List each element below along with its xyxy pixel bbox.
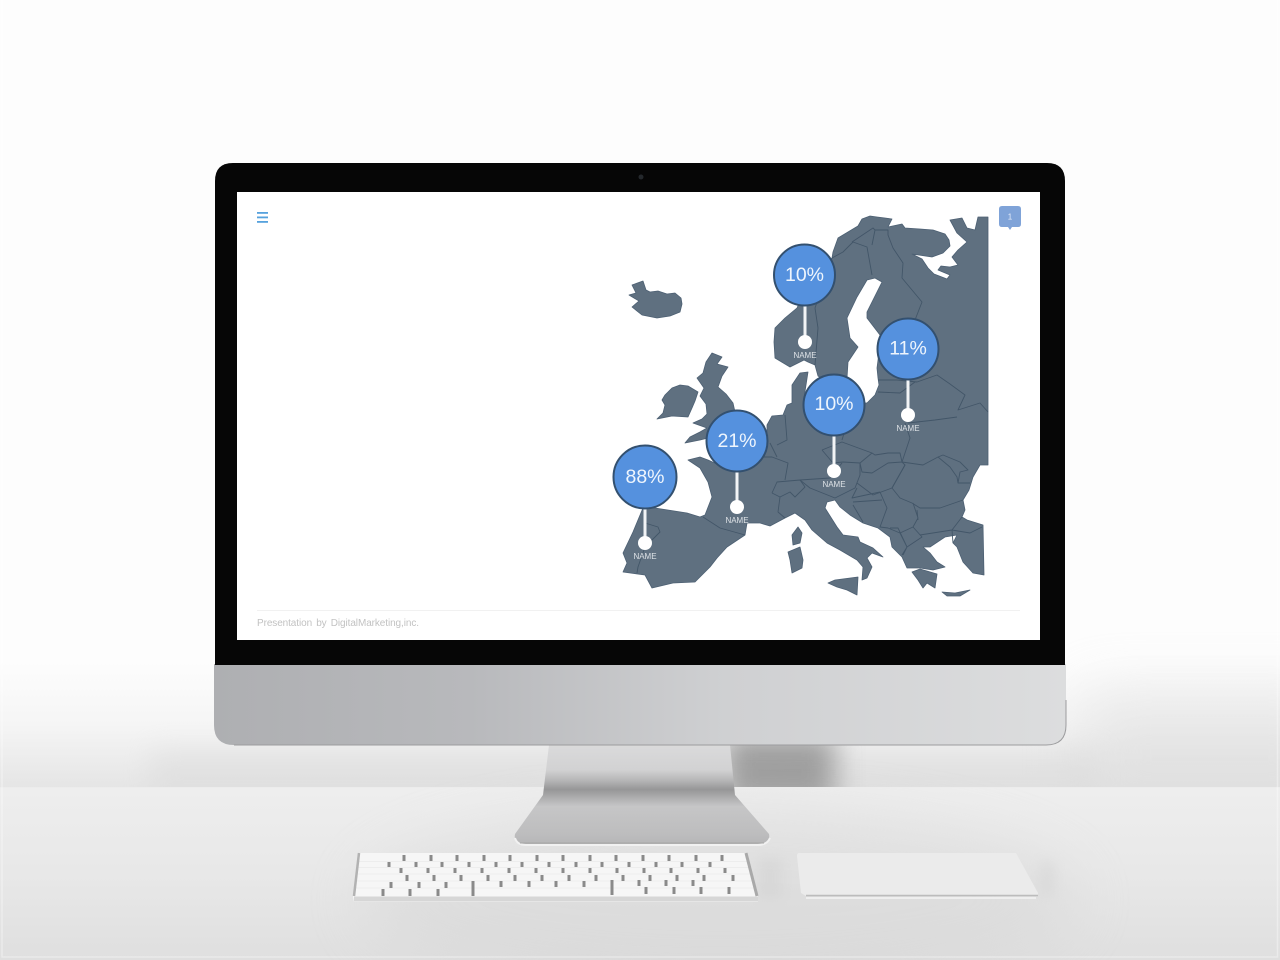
leader line	[832, 436, 836, 471]
leader line	[906, 380, 910, 415]
Sicily	[828, 577, 858, 595]
pin dot	[798, 335, 812, 349]
Switzerland, France and Benelux borders	[760, 405, 848, 518]
Iberia borders	[637, 517, 745, 573]
name label: NAME	[725, 516, 749, 525]
Corsica	[792, 527, 802, 545]
name label: NAME	[896, 424, 920, 433]
leader line	[736, 472, 738, 507]
Czech, Austria, Slovakia and Hungary borders	[800, 442, 905, 498]
name label: NAME	[822, 480, 846, 489]
monitor body	[214, 163, 1066, 745]
icon: notification bubble: 1	[1008, 212, 1013, 222]
value bubble: 11%	[889, 338, 927, 360]
Crete	[942, 590, 970, 596]
monitor bezel	[215, 163, 1065, 665]
pin dot	[827, 464, 841, 478]
pin: France 21%	[706, 410, 768, 525]
Iceland	[629, 281, 682, 318]
pin: Germany 10%	[804, 374, 864, 489]
value bubble: 21%	[717, 430, 757, 452]
pin: Norway 10%	[774, 244, 835, 360]
webcam	[638, 174, 644, 180]
value bubble: 88%	[625, 466, 665, 488]
map of Europe	[623, 216, 988, 596]
pin dot	[730, 500, 744, 514]
Sardinia	[788, 547, 803, 573]
pin dot	[901, 408, 915, 422]
pin dot	[638, 536, 652, 550]
icon: hamburger menu	[257, 212, 268, 223]
Peloponnese	[912, 569, 937, 588]
trackpad	[797, 853, 1038, 898]
leader line	[644, 508, 646, 543]
keyboard	[353, 853, 758, 902]
name label: NAME	[793, 351, 817, 360]
country borders	[637, 228, 988, 573]
key gaps	[383, 855, 733, 896]
leader line	[804, 306, 806, 342]
Scandinavia and Finland borders	[815, 228, 922, 365]
monitor stand	[515, 745, 770, 845]
Great Britain	[685, 353, 738, 443]
value bubble: 10%	[814, 393, 854, 415]
value bubble: 10%	[785, 264, 824, 286]
pin: Portugal 88%	[614, 446, 676, 561]
Ukraine, Moldova and Romania borders	[892, 455, 970, 508]
Baltic and Belarus borders	[878, 375, 988, 462]
screen	[237, 192, 1040, 640]
name label: NAME	[633, 552, 657, 561]
monitor chin	[214, 664, 1066, 745]
footer text: Presentation by DigitalMarketing,inc.	[257, 618, 419, 629]
Ireland	[657, 385, 698, 419]
Balkans borders	[852, 488, 982, 555]
pin: Russia 11%	[878, 318, 938, 433]
icon: notification bubble	[999, 206, 1021, 230]
Europe mainland	[623, 216, 988, 588]
